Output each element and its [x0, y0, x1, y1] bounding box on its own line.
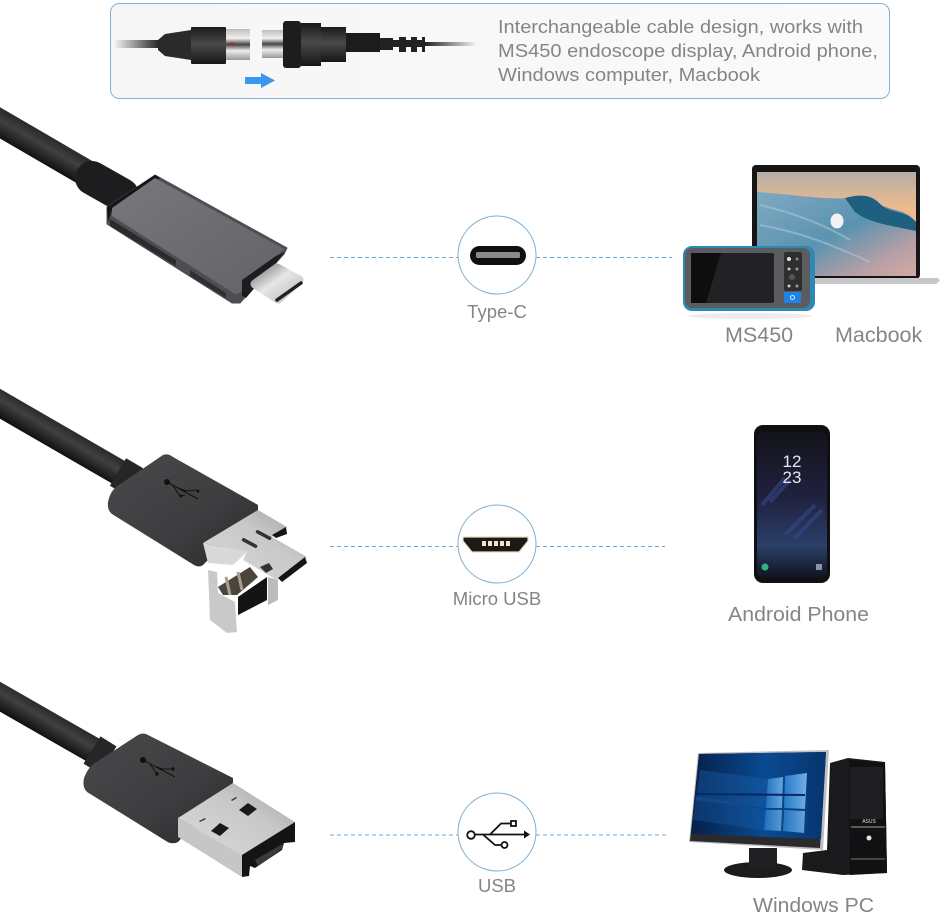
device: Windows PC tower: ASUS: [862, 819, 876, 825]
device: MS450 display: [683, 246, 815, 319]
device: Android phone: 23: [783, 468, 801, 487]
dashed connector: USB: [330, 834, 668, 836]
banner text: MS450 endoscope display, Android phone,: [498, 41, 878, 61]
dashed connector: Micro USB: [330, 546, 665, 548]
panel: interchangeable cable banner: [110, 4, 890, 98]
device: Android phone: 12: [783, 452, 801, 471]
device: Windows PC tower: [802, 758, 887, 875]
label: MS450: MS450: [725, 323, 793, 347]
icon: USB port: [458, 793, 536, 871]
label: Android Phone: Android Phone: [728, 603, 869, 626]
icon: Micro USB port: [458, 505, 536, 583]
Type-C cable and plug: [0, 117, 301, 303]
banner text: [498, 17, 878, 85]
icon: right cable connector: [262, 21, 477, 68]
label: USB: USB: [478, 875, 516, 896]
banner text: Windows computer, Macbook: [498, 65, 761, 85]
label: Type-C: Type-C: [467, 301, 527, 322]
Micro USB cable and plug: [0, 398, 307, 633]
device: Android phone: [754, 425, 830, 583]
label: Micro USB: Micro USB: [453, 588, 541, 609]
label: Macbook: Macbook: [835, 323, 922, 347]
icon: Type-C port: [458, 216, 536, 294]
dashed connector: Type-C: [330, 256, 672, 258]
USB cable and plug: [0, 691, 295, 877]
banner text: Interchangeable cable design, works with: [498, 17, 863, 37]
device: Windows PC monitor: [689, 750, 829, 878]
device: Macbook: [752, 165, 940, 284]
arrow: blue direction arrow: [245, 73, 275, 88]
icon: left cable connector: [114, 27, 250, 64]
